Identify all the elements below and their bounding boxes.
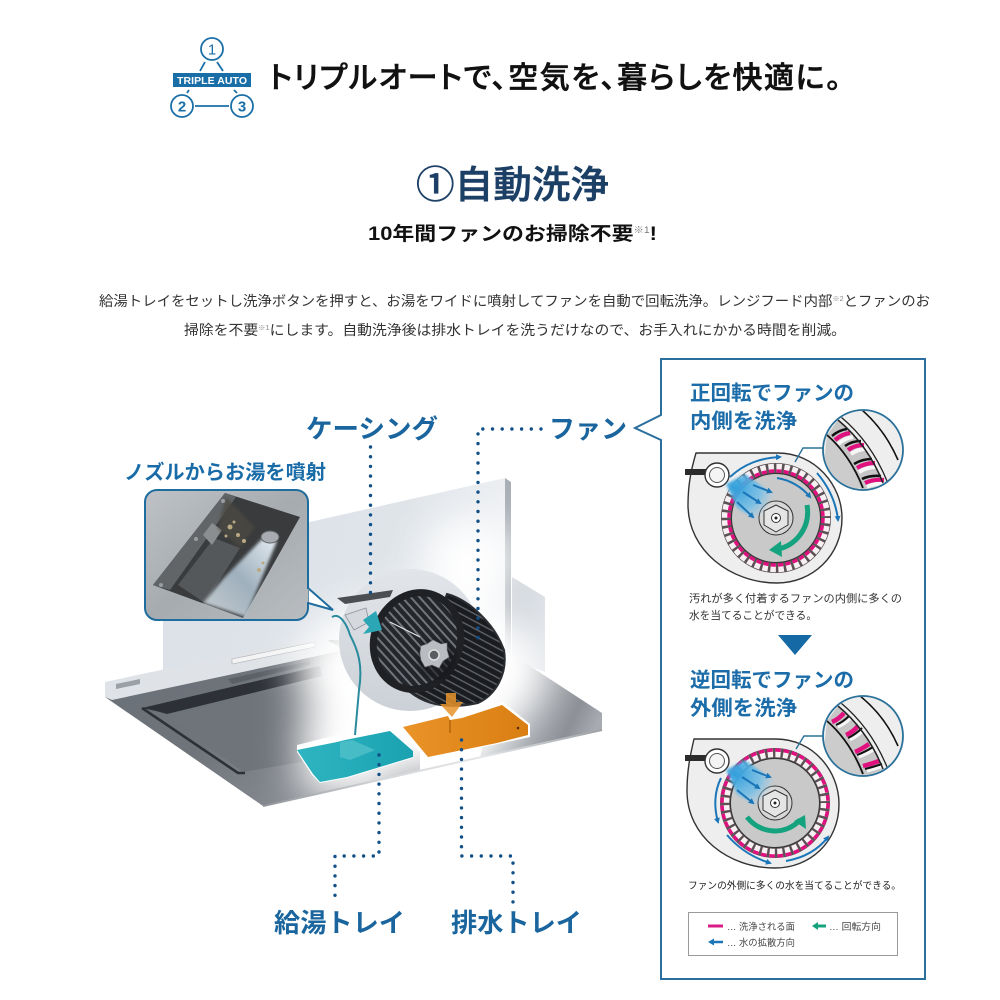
teal tube: [332, 616, 360, 735]
title: トリプルオートで、空気を、暮らしを快適に。: [269, 62, 841, 95]
panel: fan rotation: [635, 359, 925, 979]
body text: 給湯トレイをセットし洗浄ボタンを押すと、お湯をワイドに噴射してファンを自動で回転洗浄。レンジフード内部: [99, 293, 812, 309]
body text: [99, 293, 930, 338]
body text: にします。自動洗浄後は排水トレイを洗うだけなので、お手入れにかかる時間を削減。: [270, 322, 846, 338]
hood bottom edge: [263, 730, 602, 806]
range hood illustration: [105, 478, 602, 806]
icon: triple auto badge: 1: [208, 42, 216, 58]
spray: [726, 760, 775, 806]
legend: … 水の拡散方向: [727, 937, 795, 949]
white glow: [295, 520, 545, 797]
water supply tray: [297, 728, 413, 783]
heading: automatic cleaning: ①自動洗浄: [416, 165, 609, 207]
body text: とファンのお: [844, 293, 930, 309]
label: nozzle: ノズルからお湯を噴射: [124, 460, 326, 484]
body text: ※2: [832, 295, 844, 303]
caption: forward rotation: 水を当てることができる。: [689, 608, 817, 622]
infographic canvas: [99, 37, 930, 980]
fan front ring: [360, 580, 474, 702]
heading: forward rotation: [690, 382, 854, 433]
subheading: ※1: [634, 225, 650, 235]
caption: reverse rotation: ファンの外側に多くの水を当てることができる。: [688, 879, 901, 892]
teal arrow: [363, 611, 382, 634]
magnifier: [796, 736, 825, 749]
hood recess: [167, 680, 400, 772]
spray: [726, 474, 775, 520]
fan hub: [420, 640, 449, 668]
body text: ※1: [258, 324, 270, 332]
hood front lip: [105, 636, 345, 700]
icon: triple auto badge: [171, 38, 253, 117]
rotation arrow: [747, 817, 800, 831]
magnifier: [795, 448, 825, 462]
orange arrow: [440, 693, 463, 717]
water arrows: [715, 770, 828, 863]
heading: reverse rotation: 逆回転でファンの: [690, 669, 854, 692]
label: water supply tray: 給湯トレイ: [274, 908, 405, 938]
legend: … 洗浄される面: [727, 921, 795, 933]
fan drum: [410, 594, 505, 706]
arrow: down: [778, 635, 812, 655]
photo callout: nozzle spray: [145, 490, 333, 620]
label: casing: ケーシング: [306, 414, 438, 444]
diagram: reverse rotation: [685, 696, 903, 868]
fan bracket: [337, 590, 393, 604]
icon: triple auto badge: TRIPLE AUTO: [177, 75, 247, 87]
dotted leader lines: [335, 429, 541, 902]
nozzle: [685, 469, 711, 475]
rotation arrow: [778, 505, 808, 549]
caption: forward rotation: [689, 591, 902, 622]
hood underside: [105, 640, 420, 806]
heading: reverse rotation: [690, 669, 854, 720]
heading: forward rotation: 内側を洗浄: [690, 410, 797, 433]
heading: forward rotation: 正回転でファンの: [690, 382, 854, 405]
fan housing: [339, 569, 481, 711]
icon: triple auto badge: 3: [238, 98, 246, 116]
drain tray: [403, 702, 530, 759]
legend: [688, 912, 898, 956]
legend: … 回転方向: [829, 921, 881, 933]
label: drain tray: 排水トレイ: [451, 908, 582, 938]
subheading: !: [650, 224, 657, 245]
label: fan: ファン: [549, 414, 627, 444]
hood back panel: [163, 478, 505, 680]
nozzle: [685, 755, 711, 761]
icon: triple auto badge: 2: [178, 98, 186, 116]
caption: forward rotation: 汚れが多く付着するファンの内側に多くの: [689, 591, 902, 605]
body text: 掃除を不要: [184, 322, 254, 338]
water arrows: [730, 457, 838, 520]
subheading: 10年間ファンのお掃除不要: [368, 224, 598, 245]
heading: reverse rotation: 外側を洗浄: [690, 697, 797, 720]
diagram: forward rotation: [685, 410, 903, 583]
hood right underside: [480, 653, 602, 758]
